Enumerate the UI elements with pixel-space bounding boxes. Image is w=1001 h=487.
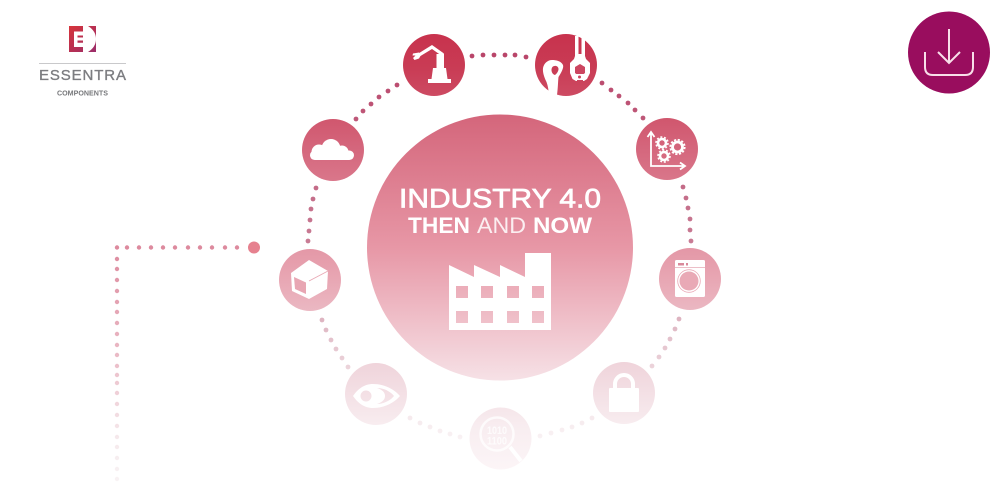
icon: chart with gears [636,118,698,180]
logo: Essentra Components [39,26,126,98]
logo rule [39,63,126,64]
subtitle: AND [477,213,526,238]
central hub [367,114,633,380]
icon: data magnifier [470,408,532,470]
icon: washing machine [659,248,721,310]
subtitle [408,213,592,238]
logo wordmark: ESSENTRA [39,67,126,84]
subtitle: NOW [533,213,592,238]
icon: eye [345,363,407,425]
icon: robot arm [403,34,465,96]
icon: data magnifier: 1010 [487,425,507,437]
icon: padlock [593,362,655,424]
logo mark [69,26,96,52]
icon: cloud [302,119,364,181]
logo subline: COMPONENTS [57,88,108,98]
download button [908,12,990,94]
icon: data magnifier: 1100 [487,436,507,448]
icon: factory [449,253,551,330]
subtitle: THEN [408,213,470,238]
dotted ring between icons [306,53,693,439]
connector: dotted line to the left [115,242,260,481]
icon: 3D box [279,249,341,311]
title: INDUSTRY 4.0 [399,184,601,214]
icon: hand and wrench [535,34,597,96]
